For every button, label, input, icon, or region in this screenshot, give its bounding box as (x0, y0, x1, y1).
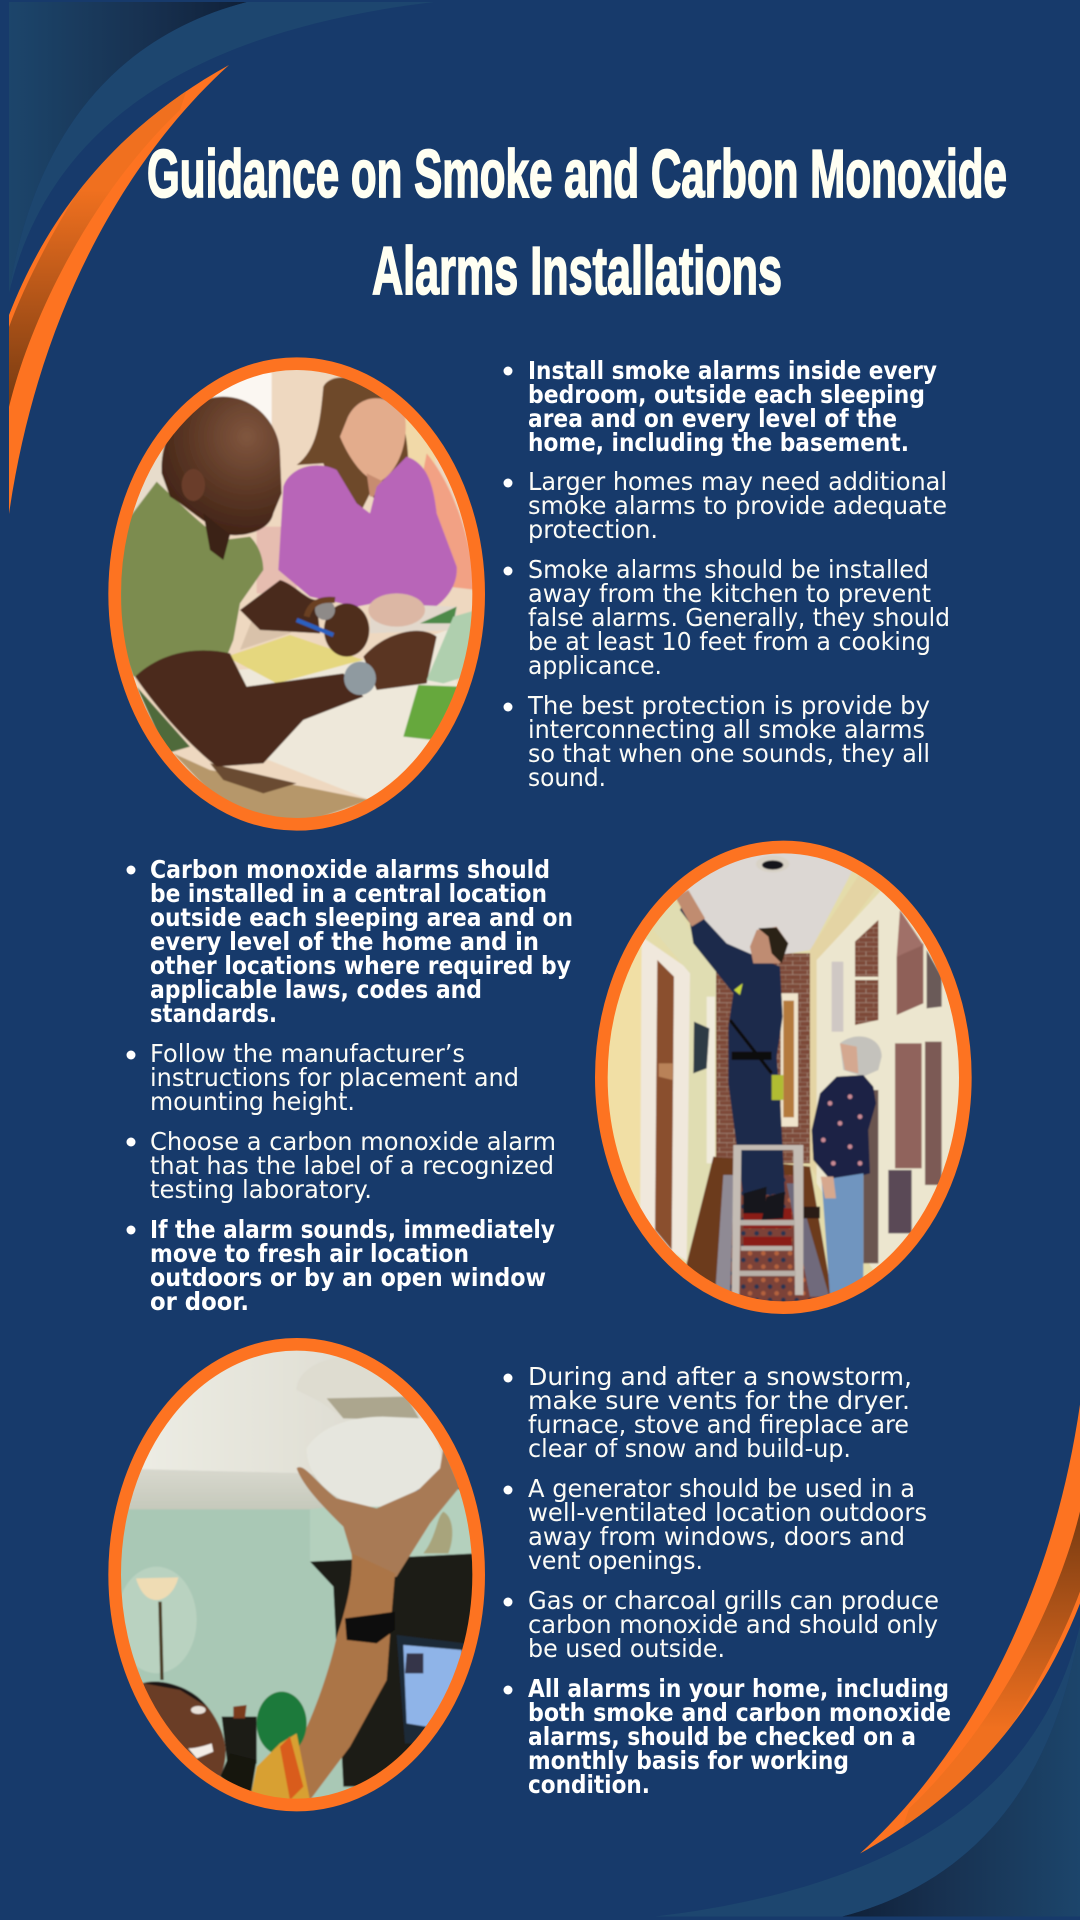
bullet list 2 item 1: be installed in a central location (150, 879, 547, 908)
bullet list 2 item 3: that has the label of a recognized (150, 1151, 554, 1180)
text block: smoke alarm placement (504, 356, 950, 792)
bullet list 2 item 1: applicable laws, codes and (150, 975, 482, 1004)
decorative swoosh: bottom right (655, 1404, 1080, 1916)
bullet list 1 item 4 (504, 691, 930, 792)
bullet list 2 item 1: standards. (150, 999, 277, 1028)
title: Alarms Installations (372, 233, 782, 309)
bullet list 2 item 1: other locations where required by (150, 951, 571, 980)
bullet list 2 item 4: outdoors or by an open window (150, 1263, 546, 1292)
bullet list 2 item 1: Carbon monoxide alarms should (150, 855, 550, 884)
bullet list 3 item 4 (504, 1674, 951, 1799)
photo 1 orange ring (115, 364, 479, 824)
photo 3 orange ring (115, 1344, 479, 1805)
text block: carbon monoxide alarm placement (126, 855, 573, 1316)
bullet list 1 item 4: so that when one sounds, they all (528, 739, 930, 768)
bullet list 2 item 4: move to fresh air location (150, 1239, 469, 1268)
bullet list 1 item 4: interconnecting all smoke alarms (528, 715, 925, 744)
bullet list 1 item 3: Smoke alarms should be installed (528, 555, 929, 584)
bullet list 3 item 4: All alarms in your home, including (528, 1674, 949, 1703)
photo 2 orange ring (601, 847, 965, 1308)
bullet list 3 item 1 (504, 1362, 912, 1463)
bullet list 1 item 4: The best protection is provide by (527, 691, 930, 720)
bullet list 3 item 1: During and after a snowstorm, (528, 1362, 912, 1391)
bullet list 1 item 2: smoke alarms to provide adequate (528, 491, 947, 520)
bullet list 3 item 3: be used outside. (528, 1634, 725, 1663)
bullet list 2 item 2: Follow the manufacturer’s (150, 1039, 465, 1068)
bullet list 3 item 4: both smoke and carbon monoxide (528, 1698, 951, 1727)
bullet list 3 item 2: away from windows, doors and (528, 1522, 905, 1551)
bullet list 1 item 3 (504, 555, 950, 680)
title (147, 136, 1007, 309)
text block: vents, generators, grills and monthly checks (504, 1362, 951, 1799)
bullet list 3 item 3: Gas or charcoal grills can produce (528, 1586, 939, 1615)
bullet list 2 item 2: mounting height. (150, 1087, 355, 1116)
bullet list 3 item 2 (504, 1474, 927, 1575)
bullet list 2 item 1: outside each sleeping area and on (150, 903, 573, 932)
bullet list 1 item 2: protection. (528, 515, 658, 544)
bullet list 1 item 2 (504, 467, 947, 544)
bullet list 2 item 3: testing laboratory. (150, 1175, 372, 1204)
bullet list 3 item 1: clear of snow and build-up. (528, 1434, 851, 1463)
bullet list 1 item 3: be at least 10 feet from a cooking (528, 627, 931, 656)
photo 1: couple reviewing a home safety plan at a table (110, 360, 490, 827)
bullet list 3 item 4: alarms, should be checked on a (528, 1722, 916, 1751)
bullet list 3 item 1: make sure vents for the dryer. (528, 1386, 910, 1415)
bullet list 2 item 4: If the alarm sounds, immediately (150, 1215, 555, 1244)
bullet list 3 item 2: vent openings. (528, 1546, 703, 1575)
bullet list 3 item 4: monthly basis for working (528, 1746, 849, 1775)
bullet list 1 item 1 (504, 356, 937, 457)
bullet list 2 item 1 (126, 855, 573, 1028)
bullet list 2 item 3 (126, 1127, 556, 1204)
bullet list 3 item 3: carbon monoxide and should only (528, 1610, 938, 1639)
photo 2: firefighter on a ladder installing an alarm in a hallway (600, 843, 980, 1310)
bullet list 2 item 1: every level of the home and in (150, 927, 539, 956)
bullet list 2 item 3: Choose a carbon monoxide alarm (150, 1127, 556, 1156)
bullet list 2 item 4 (126, 1215, 555, 1316)
bullet list 1 item 1: area and on every level of the (528, 404, 897, 433)
decorative swoosh: top left (9, 2, 434, 514)
bullet list 1 item 1: Install smoke alarms inside every (528, 356, 937, 385)
bullet list 3 item 1: furnace, stove and fireplace are (528, 1410, 909, 1439)
photo 3: person reaching up to a ceiling smoke alarm (110, 1340, 490, 1809)
bullet list 1 item 3: applicance. (528, 651, 662, 680)
bullet list 2 item 2: instructions for placement and (150, 1063, 519, 1092)
bullet list 3 item 2: well-ventilated location outdoors (528, 1498, 927, 1527)
bullet list 2 item 4: or door. (150, 1287, 249, 1316)
bullet list 3 item 2: A generator should be used in a (528, 1474, 915, 1503)
bullet list 1 item 3: false alarms. Generally, they should (528, 603, 950, 632)
bullet list 1 item 1: bedroom, outside each sleeping (528, 380, 925, 409)
bullet list 3 item 4: condition. (528, 1770, 650, 1799)
bullet list 1 item 3: away from the kitchen to prevent (528, 579, 931, 608)
bullet list 3 item 3 (504, 1586, 939, 1663)
bullet list 2 item 2 (126, 1039, 519, 1116)
bullet list 1 item 2: Larger homes may need additional (528, 467, 947, 496)
bullet list 1 item 1: home, including the basement. (528, 428, 909, 457)
bullet list 1 item 4: sound. (528, 763, 606, 792)
